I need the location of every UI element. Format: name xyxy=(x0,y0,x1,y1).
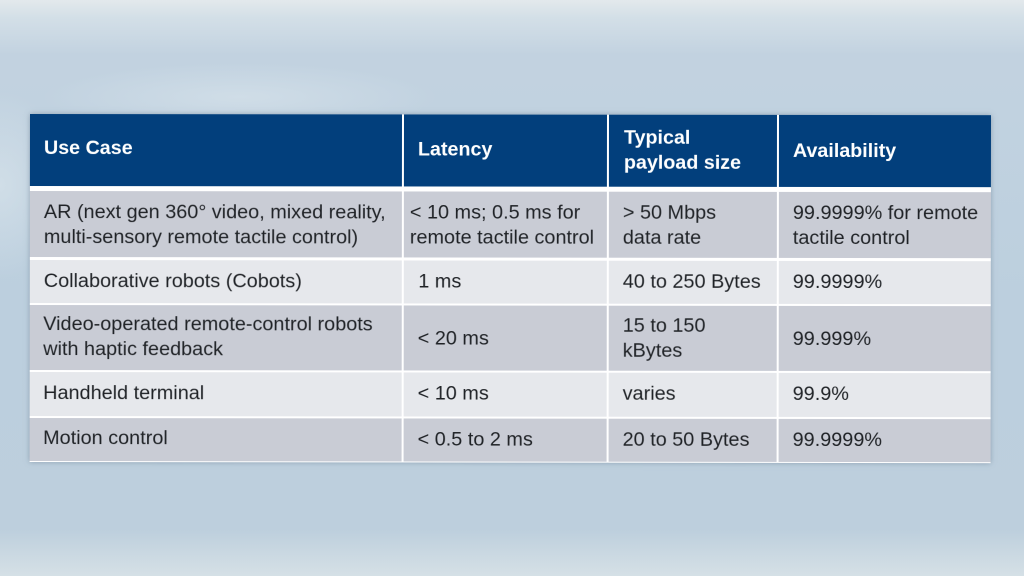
row 4: latency xyxy=(404,372,607,416)
row 2: availability: 99.9999% xyxy=(793,270,882,292)
header: availability: Availability xyxy=(793,140,896,162)
row 2: availability xyxy=(779,261,991,304)
row 2: cobots use case: Collaborative robots (Cobots) xyxy=(44,269,302,292)
row 1: AR use case xyxy=(30,190,402,258)
row 3: latency xyxy=(404,305,607,370)
row 1: latency xyxy=(404,191,607,258)
row 1: payload: > 50 Mbps xyxy=(623,202,716,224)
row 5: motion control use case: Motion control xyxy=(43,426,168,448)
row 4: latency: < 10 ms xyxy=(418,382,489,404)
row 3: video-operated robots use case xyxy=(30,305,402,370)
row 1: payload: data rate xyxy=(623,227,701,249)
row 5: availability xyxy=(779,419,991,462)
row 3: payload xyxy=(609,305,777,370)
header: availability xyxy=(779,115,991,186)
row 2: cobots use case xyxy=(30,260,402,303)
background glow left xyxy=(0,90,70,280)
background glow xyxy=(40,62,440,132)
row 3: payload: kBytes xyxy=(623,339,682,361)
header: typical payload size: payload size xyxy=(624,151,741,173)
header: use case xyxy=(30,114,402,186)
row 4: handheld terminal use case xyxy=(30,372,402,416)
header: latency xyxy=(404,114,607,186)
row 1: availability xyxy=(779,191,991,258)
row 5: motion control use case xyxy=(30,418,402,461)
row 1: latency: remote tactile control xyxy=(410,226,594,249)
row 5: latency: < 0.5 to 2 ms xyxy=(418,428,533,450)
row 2: payload: 40 to 250 Bytes xyxy=(623,270,761,292)
row 1: availability: tactile control xyxy=(793,226,910,249)
row 5: payload: 20 to 50 Bytes xyxy=(623,428,749,450)
row 4: payload xyxy=(609,372,777,417)
row 3: video-operated robots use case: with haptic feedback xyxy=(43,338,223,360)
header: typical payload size xyxy=(609,114,777,186)
row 3: video-operated robots use case: Video-operated remote-control robots xyxy=(43,313,373,335)
row 3: availability: 99.999% xyxy=(793,327,871,349)
row 3: payload: 15 to 150 xyxy=(623,314,706,336)
row 1: AR use case: multi-sensory remote tactile control) xyxy=(44,226,358,248)
row 5: payload xyxy=(609,418,777,462)
row 5: availability: 99.9999% xyxy=(793,428,882,450)
row 5: latency xyxy=(404,418,607,461)
header: typical payload size: Typical xyxy=(624,126,690,148)
row 2: latency xyxy=(404,260,607,303)
row 2: payload xyxy=(609,260,777,304)
row 4: availability: 99.9% xyxy=(793,382,849,404)
row 1: AR use case: AR (next gen 360° video, mixed reality, xyxy=(44,201,386,223)
row 4: payload: varies xyxy=(623,382,676,404)
header: use case: Use Case xyxy=(44,137,133,159)
row 4: availability xyxy=(779,373,991,417)
table xyxy=(30,114,991,463)
row 4: handheld terminal use case: Handheld terminal xyxy=(43,381,204,403)
row 1: latency: < 10 ms; 0.5 ms for xyxy=(410,201,580,224)
header: latency: Latency xyxy=(418,138,492,160)
row 3: availability xyxy=(779,306,991,371)
row 1: availability: 99.9999% for remote xyxy=(793,201,978,224)
row 3: latency: < 20 ms xyxy=(418,327,489,349)
row 2: latency: 1 ms xyxy=(418,270,461,292)
row 1: payload xyxy=(609,191,777,258)
